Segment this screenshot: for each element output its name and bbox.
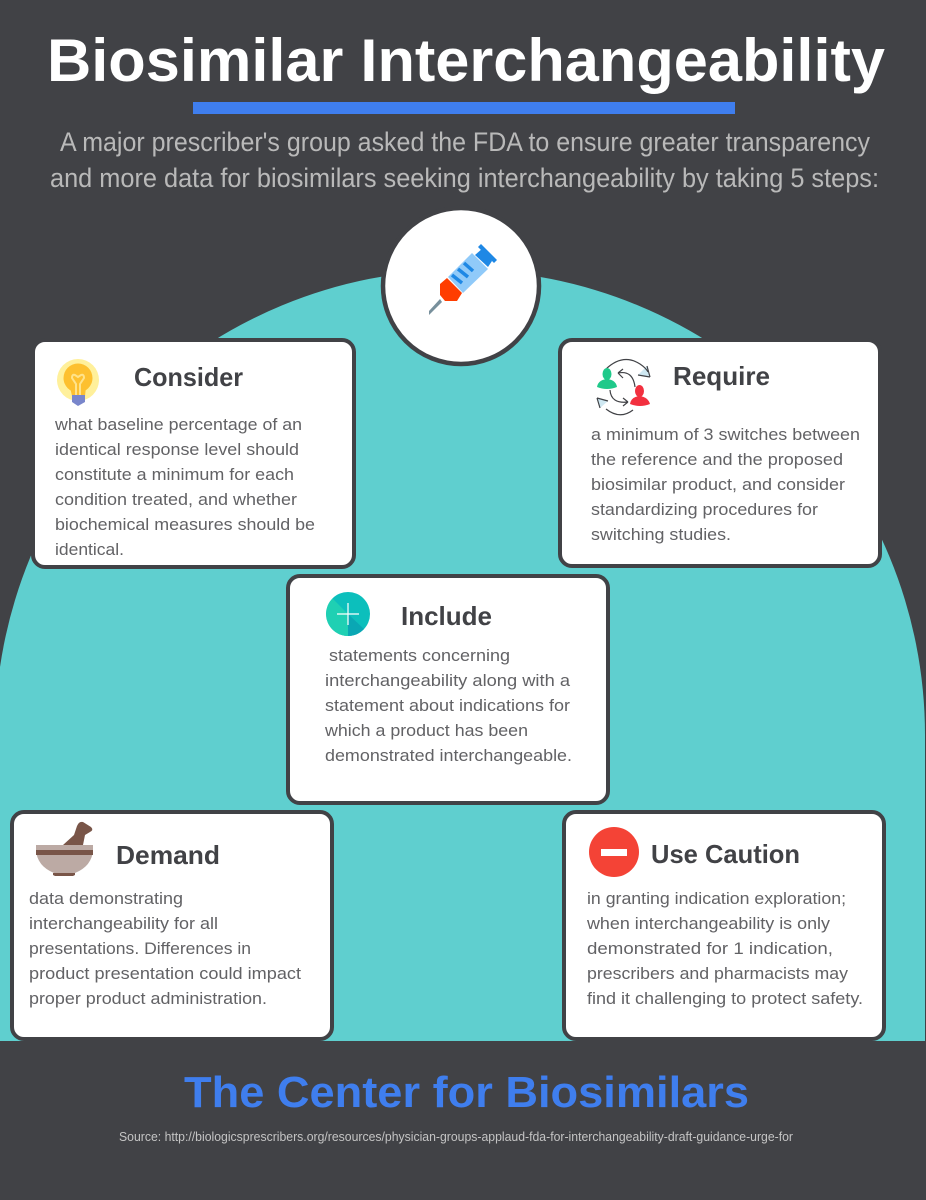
text: demand: product presentation could impact <box>29 964 301 983</box>
subtitle: A major prescriber's group asked the FDA to ensure greater transparency <box>60 127 870 157</box>
text: include: statements concerning <box>329 646 510 665</box>
text: use caution: prescribers and pharmacists may <box>587 964 849 983</box>
heading: demand: Demand <box>116 840 220 870</box>
heading: use caution: Use Caution <box>651 839 800 869</box>
panel: use caution <box>564 812 884 1039</box>
text: require <box>591 425 860 544</box>
text: demand: data demonstrating <box>29 889 183 908</box>
text: require: standardizing procedures for <box>591 500 818 519</box>
text: consider: identical response level should <box>55 440 299 459</box>
panel: demand <box>12 812 332 1039</box>
text: use caution <box>586 889 863 1008</box>
icon: light bulb <box>57 359 99 406</box>
heading: require: Require <box>673 361 770 391</box>
icon: switching people <box>597 360 650 415</box>
teal dome background <box>0 270 925 1041</box>
text: use caution: demonstrated for 1 indication, <box>587 939 833 958</box>
heading: consider: Consider <box>134 362 243 392</box>
text: demand: proper product administration. <box>29 989 267 1008</box>
text: include: demonstrated interchangeable. <box>325 746 572 765</box>
text: require: a minimum of 3 switches between <box>591 425 860 444</box>
panel: require <box>560 340 880 566</box>
heading: include: Include <box>401 601 492 631</box>
text: consider: what baseline percentage of an <box>54 415 302 434</box>
text: consider <box>54 415 315 559</box>
icon: syringe in circle <box>383 208 539 364</box>
text: consider: identical. <box>55 540 124 559</box>
text: require: switching studies. <box>591 525 731 544</box>
text: consider: condition treated, and whether <box>55 490 297 509</box>
icon: mortar and pestle <box>36 822 93 876</box>
icon: no entry <box>589 827 639 877</box>
panel: consider <box>33 340 354 567</box>
title: Biosimilar Interchangeability <box>47 27 886 94</box>
source line: Source: http://biologicsprescribers.org/resources/physician-groups-applaud-fda-for-interchangeability-draft-guidance-urge-for <box>119 1130 793 1144</box>
icon: plus circle <box>326 592 370 636</box>
text: demand <box>29 889 301 1008</box>
panel: include <box>288 576 608 803</box>
text: include <box>324 646 572 765</box>
text: demand: presentations. Differences in <box>29 939 251 958</box>
text: include: interchangeability along with a <box>325 671 571 690</box>
text: include: which a product has been <box>324 721 528 740</box>
title underline bar <box>193 102 735 114</box>
text: demand: interchangeability for all <box>29 914 218 933</box>
text: use caution: in granting indication exploration; <box>587 889 846 908</box>
subtitle <box>50 127 879 193</box>
text: consider: constitute a minimum for each <box>55 465 294 484</box>
text: use caution: when interchangeability is only <box>586 914 831 933</box>
text: consider: biochemical measures should be <box>55 515 315 534</box>
text: use caution: find it challenging to protect safety. <box>587 989 863 1008</box>
footer brand: The Center for Biosimilars <box>184 1068 749 1117</box>
text: include: statement about indications for <box>325 696 570 715</box>
text: require: the reference and the proposed <box>591 450 843 469</box>
text: require: biosimilar product, and consider <box>591 475 845 494</box>
subtitle: and more data for biosimilars seeking interchangeability by taking 5 steps: <box>50 163 879 193</box>
